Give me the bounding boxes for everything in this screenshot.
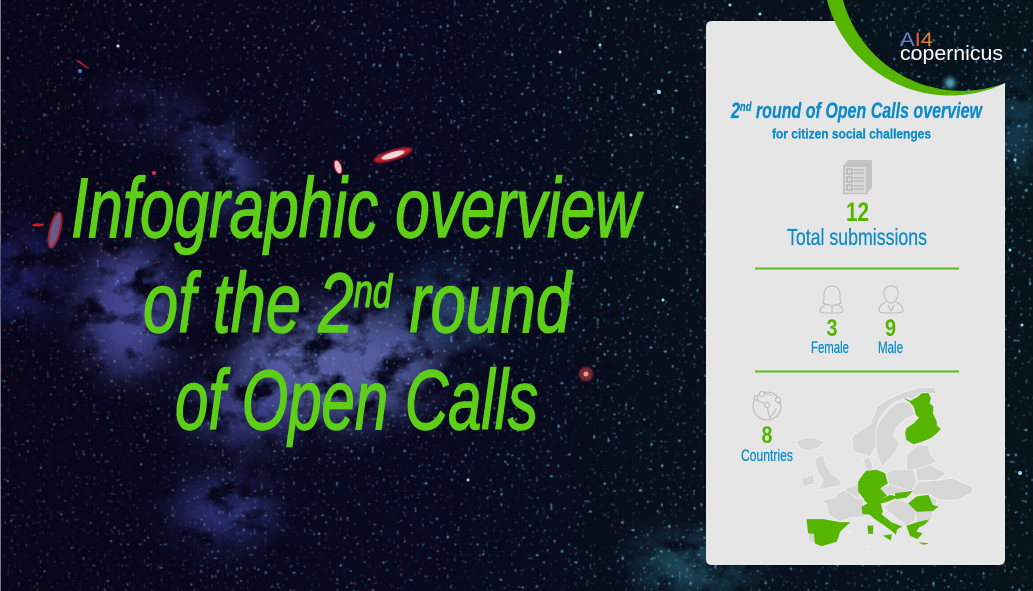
galaxies (32, 59, 593, 381)
title: of Open Calls (175, 353, 538, 447)
title: Infographic overview (71, 161, 644, 255)
title: of the 2 (143, 256, 423, 350)
heading: nd (740, 99, 752, 114)
icon: checklist (843, 160, 872, 194)
title: nd (354, 265, 393, 317)
panel: overview card (706, 0, 1005, 565)
title (71, 161, 644, 447)
map of Europe (796, 388, 973, 547)
icon: male (879, 286, 903, 313)
stat: male: Male (878, 339, 903, 357)
stat: male: 9 (885, 315, 896, 342)
icon: globe with pins (753, 392, 781, 420)
logo: AI4 copernicus: copernicus (900, 43, 1003, 65)
heading: 2 (731, 98, 743, 123)
green corner arc (827, 0, 1005, 96)
logo: AI4 copernicus (900, 30, 1003, 65)
central and southern countries (802, 455, 973, 547)
icon: female (820, 286, 843, 313)
stat: male (878, 315, 903, 357)
stat: total submissions: Total submissions (787, 224, 927, 250)
heading: for citizen social challenges (772, 126, 931, 142)
logo: AI4 copernicus: AI4 (900, 30, 933, 51)
stat: countries: Countries (741, 447, 793, 465)
stat: female: 3 (826, 315, 838, 342)
stat: countries: 8 (762, 422, 772, 449)
stat: female (811, 315, 849, 357)
stat: female: Female (811, 339, 849, 357)
stat: total submissions (787, 197, 927, 250)
northern countries (796, 388, 941, 470)
heading (730, 98, 983, 142)
stat: countries (741, 422, 793, 465)
title: round (392, 256, 573, 350)
stat: total submissions: 12 (846, 197, 869, 227)
bright stars (78, 4, 1026, 482)
